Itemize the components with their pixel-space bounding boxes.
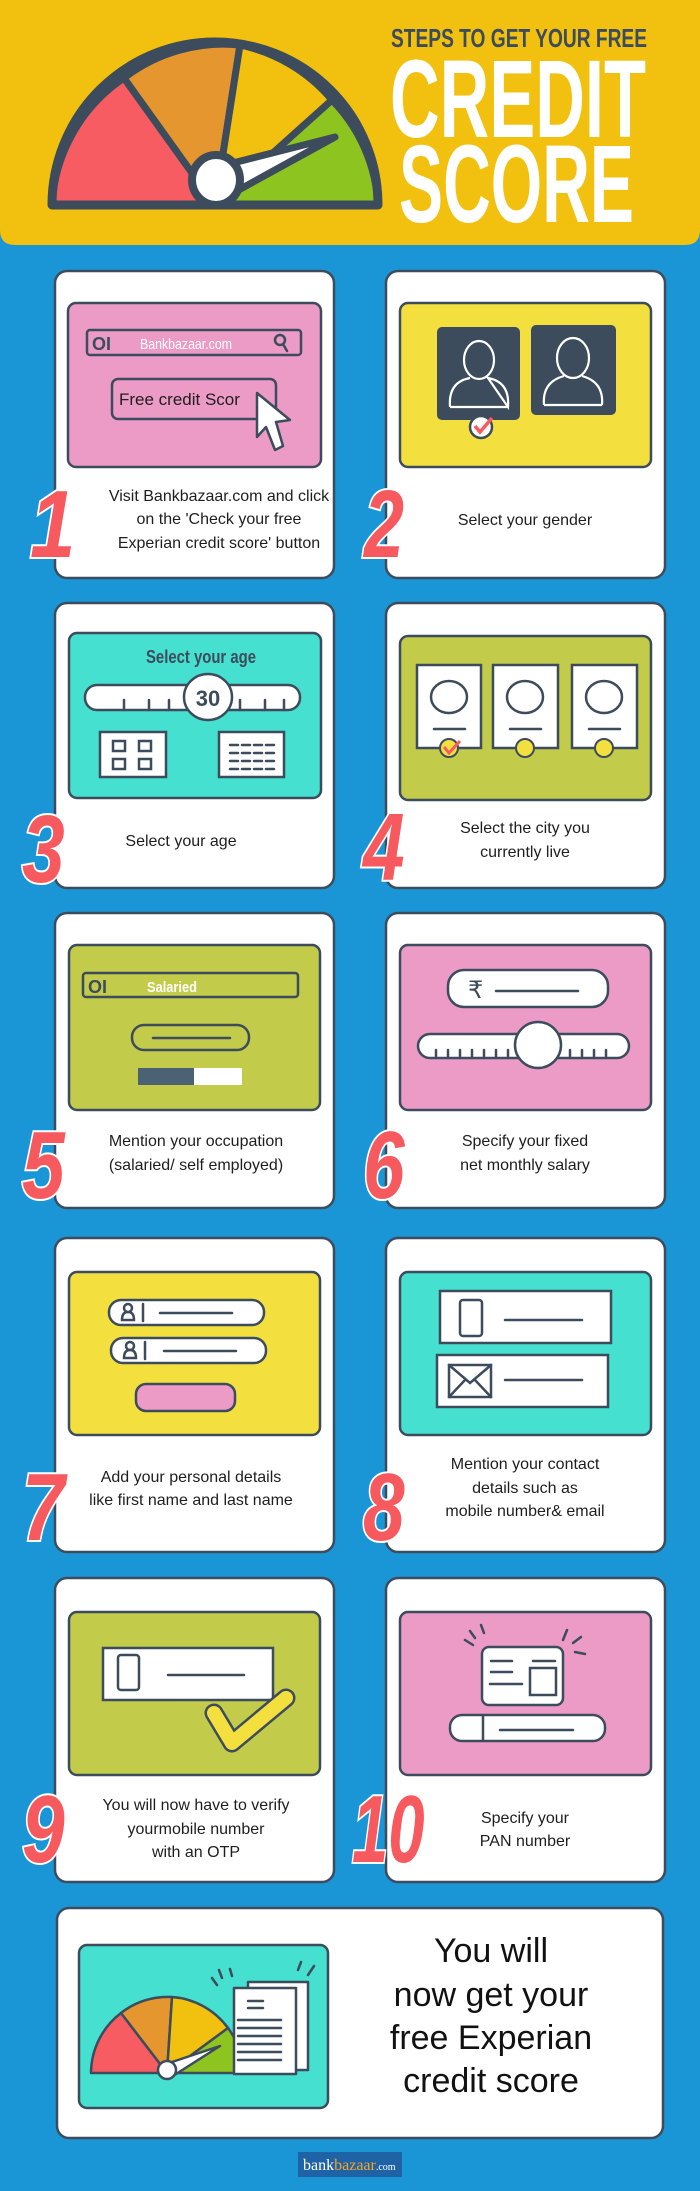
number 9: 9 [22,1776,65,1883]
text 4 [460,820,590,861]
logo: bankbazaar [298,2152,402,2177]
text 6 [460,1133,590,1174]
text 1: Experian credit score' button [118,535,320,552]
text 8: mobile number& email [445,1503,605,1520]
card 10 [352,1578,665,1883]
icon: credit gauge [52,42,378,205]
illustration: age slider: Select your age [146,647,256,667]
text 10: PAN number [480,1833,571,1850]
illustration: age slider: 30 [196,686,220,711]
text: final message [390,1932,592,2100]
text: final message: credit score [403,2062,579,2100]
header banner [0,0,700,246]
illustration: age slider [69,633,321,798]
text: final message: You will [434,1932,548,1970]
card 1 [30,271,334,578]
illustration: contact details [400,1272,651,1435]
illustration: website search: OI [92,334,111,354]
text 7: Add your personal details [101,1469,281,1486]
illustration: personal details form [69,1272,320,1435]
card 3 [22,603,334,903]
illustration: salary slider: ₹ [468,977,483,1004]
text 6: net monthly salary [460,1157,590,1174]
number 8: 8 [363,1454,405,1561]
text 3: Select your age [125,833,237,850]
text 8 [445,1456,605,1520]
number 3: 3 [22,796,65,903]
card 7 [22,1238,334,1561]
text 1: Visit Bankbazaar.com and click [109,488,330,505]
text 5 [109,1133,283,1174]
text 7 [89,1469,293,1509]
illustration: OTP verify [69,1612,320,1775]
final card [57,1908,663,2138]
illustration: website search [68,303,321,467]
illustration: gender [400,303,651,467]
number 10: 10 [352,1777,425,1883]
text 10: Specify your [481,1810,570,1827]
card 6 [363,913,665,1219]
illustration: website search: Free credit Scor [119,390,240,409]
number 2: 2 [362,470,404,577]
text 5: Mention your occupation [109,1133,283,1150]
card 2 [362,271,665,578]
text 9: with an OTP [151,1844,240,1861]
illustration: occupation [69,945,320,1110]
text 9: You will now have to verify [102,1797,290,1814]
text 2: Select your gender [458,512,593,529]
number 1: 1 [30,470,75,577]
text: final message: free Experian [390,2019,592,2057]
text 9: yourmobile number [128,1821,265,1838]
text 8: Mention your contact [451,1456,600,1473]
number 7: 7 [22,1454,68,1561]
card 5 [22,913,334,1219]
text 1: on the 'Check your free [137,511,302,528]
number 6: 6 [363,1112,406,1219]
illustration: city cards [400,636,651,800]
card 8 [363,1238,665,1561]
text 7: like first name and last name [89,1492,293,1509]
text 10 [480,1810,571,1850]
text 9 [102,1797,290,1861]
illustration: occupation: OI [88,977,107,997]
text 8: details such as [472,1480,578,1497]
number 5: 5 [22,1112,66,1219]
text: final message: now get your [394,1976,588,2014]
illustration: PAN card [400,1612,651,1775]
illustration: score result [79,1945,328,2108]
card 9 [22,1578,334,1883]
text 1 [109,488,330,552]
illustration: salary slider [400,945,651,1110]
illustration: website search: Bankbazaar.com [140,336,232,353]
text 4: Select the city you [460,820,590,837]
text 5: (salaried/ self employed) [109,1157,283,1174]
title [390,23,647,246]
number 4: 4 [361,794,405,901]
text 4: currently live [480,844,570,861]
card 4 [361,603,665,901]
text 6: Specify your fixed [462,1133,588,1150]
logo: bankbazaar: bankbazaar.com [303,2157,396,2174]
illustration: occupation: Salaried [147,979,197,996]
